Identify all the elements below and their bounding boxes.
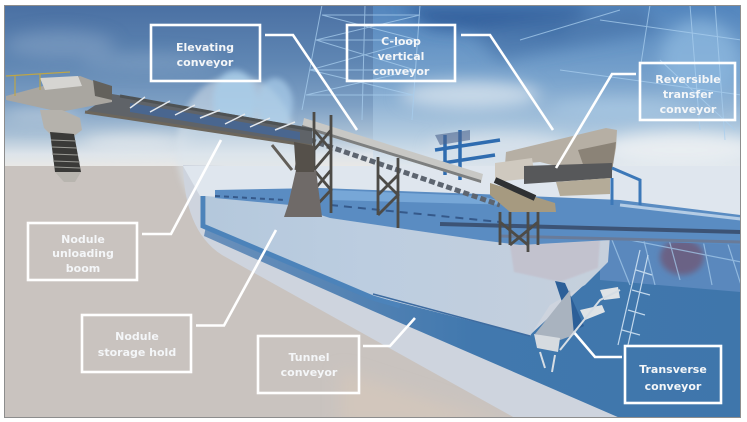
sky [4,5,741,167]
callout: Tunnel conveyor [258,318,415,393]
hopper platform [6,76,112,112]
hopper funnel [40,110,82,136]
translucent ship glow [176,68,294,191]
warm ground lower right [350,388,423,415]
pale zone behind deck [183,166,741,216]
callout: Elevating conveyor [151,25,357,130]
clouds [0,5,747,168]
lattice band behind hull [600,236,741,292]
unloading boom [85,94,312,170]
support frames [314,112,538,252]
callout: Nodule storage hold: Nodule [115,330,159,343]
wireframe tower [302,5,741,140]
callout: Reversible transfer conveyor: Reversible [655,73,721,86]
hull body [206,196,610,336]
callout: C-loop vertical conveyor: C-loop [381,35,421,48]
elevating conveyor tube [302,118,483,183]
C-loop housing [505,128,617,166]
callout: Nodule unloading boom: Nodule [61,233,105,246]
elevating conveyor truss [310,140,500,205]
callout: Elevating conveyor: conveyor [177,56,234,69]
callout: C-loop vertical conveyor: vertical [378,50,424,63]
callout: Elevating conveyor: Elevating [176,41,234,54]
callout: Transverse conveyor [572,330,721,403]
hull tinted block [510,240,600,282]
pale outer hull band [183,165,618,417]
transfer conveyor [524,163,612,184]
black coil chute [50,132,81,172]
callout: C-loop vertical conveyor: conveyor [373,65,430,78]
dark blob behind lattice [660,239,704,275]
sea [204,226,741,418]
far deck equipment [430,130,500,180]
central cone pedestal [284,170,322,217]
callout: Tunnel conveyor: conveyor [281,366,338,379]
keel band [203,196,400,306]
callout: Nodule unloading boom: unloading [52,247,114,260]
ground [5,166,513,417]
callout: Tunnel conveyor: Tunnel [288,351,330,364]
deck strip [215,188,741,245]
callout: Reversible transfer conveyor: transfer [663,88,714,101]
callout: Nodule storage hold [82,230,276,372]
transverse conveyor gear [534,250,652,372]
callout: Transverse conveyor: conveyor [645,380,702,393]
callout: Reversible transfer conveyor [556,63,735,168]
callout: Nodule unloading boom: boom [66,262,100,275]
callout: Nodule storage hold: storage hold [98,346,176,359]
callout: C-loop vertical conveyor [347,25,553,130]
callout: Transverse conveyor: Transverse [639,363,707,376]
callout: Nodule unloading boom [28,140,221,280]
callout: Reversible transfer conveyor: conveyor [660,103,717,116]
tan truss [490,183,556,212]
right sky tint [373,5,741,167]
